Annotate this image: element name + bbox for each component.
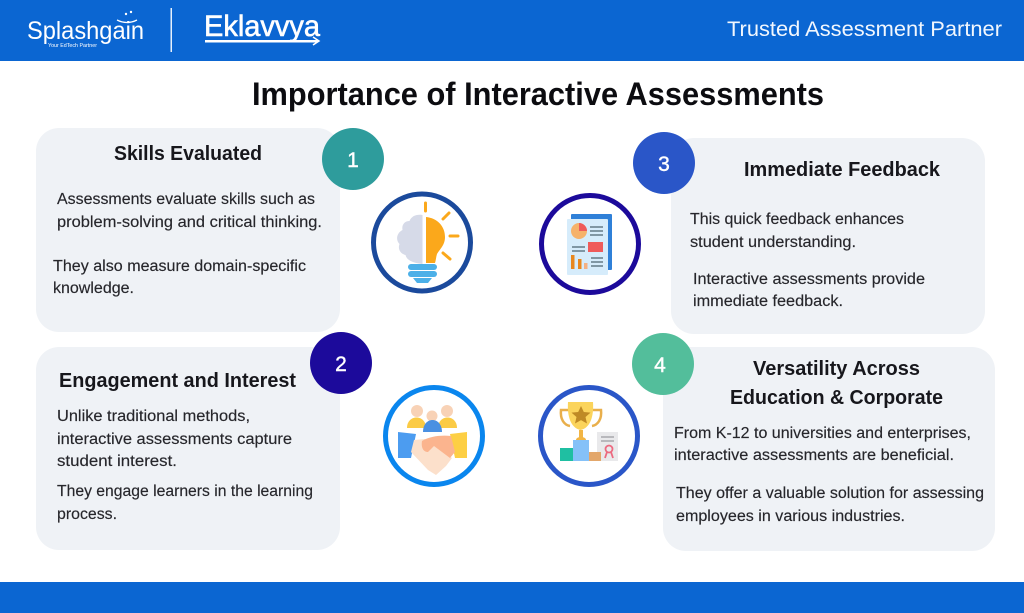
panel: immediate feedback xyxy=(671,138,985,334)
text: engagement paragraph two: They engage learners in the learning xyxy=(57,483,313,500)
header bar xyxy=(0,0,1024,61)
text: skills paragraph two: They also measure domain-specific xyxy=(53,258,306,275)
text: feedback paragraph two: immediate feedback. xyxy=(693,293,843,310)
text: skills paragraph one: Assessments evaluate skills such as xyxy=(57,191,315,208)
text: versatility paragraph one: interactive assessments are beneficial. xyxy=(674,447,954,464)
text: skills paragraph one: problem-solving and critical thinking. xyxy=(57,214,322,231)
icon: handshake team xyxy=(386,388,482,484)
tagline: Trusted Assessment Partner xyxy=(727,18,1002,41)
text: feedback paragraph two: Interactive assessments provide xyxy=(693,271,925,288)
heading: skills evaluated: Skills Evaluated xyxy=(114,143,262,165)
icon: report document xyxy=(542,196,638,292)
text: versatility paragraph one: From K-12 to universities and enterprises, xyxy=(674,425,971,442)
number badge 4 xyxy=(632,333,694,395)
text: engagement paragraph one: Unlike traditional methods, xyxy=(57,408,250,425)
number badge 4: 4 xyxy=(654,354,666,377)
number badge 3: 3 xyxy=(658,153,670,176)
heading: engagement and interest: Engagement and Interest xyxy=(59,370,296,392)
text: versatility paragraph two: employees in various industries. xyxy=(676,508,905,525)
heading: versatility: Versatility Across xyxy=(753,358,920,380)
heading: versatility xyxy=(730,358,943,409)
number badge 1: 1 xyxy=(347,149,359,172)
text: skills paragraph two xyxy=(53,258,306,297)
text: engagement paragraph two: process. xyxy=(57,506,117,523)
number badge 3 xyxy=(633,132,695,194)
number badge 2 xyxy=(310,332,372,394)
text: feedback paragraph one xyxy=(690,211,904,251)
text: engagement paragraph one: interactive assessments capture xyxy=(57,431,292,448)
text: versatility paragraph two xyxy=(676,485,984,525)
logo: Eklavvya: Eklavvya xyxy=(204,10,320,43)
text: engagement paragraph one: student interest. xyxy=(57,453,177,470)
text: engagement paragraph two xyxy=(57,483,313,523)
logo: Splashgain: Splashgain xyxy=(27,17,144,45)
text: feedback paragraph two xyxy=(693,271,925,310)
text: feedback paragraph one: student understanding. xyxy=(690,234,856,251)
panel: engagement and interest xyxy=(36,347,340,550)
panel: skills evaluated xyxy=(36,128,340,332)
number badge 2: 2 xyxy=(335,353,347,376)
logo: Splashgain: Your EdTech Partner xyxy=(48,43,97,49)
panel: versatility xyxy=(663,347,995,551)
text: skills paragraph two: knowledge. xyxy=(53,280,134,297)
text: skills paragraph one xyxy=(57,191,322,231)
heading: versatility: Education & Corporate xyxy=(730,387,943,409)
title: Importance of Interactive Assessments xyxy=(252,76,824,112)
text: feedback paragraph one: This quick feedback enhances xyxy=(690,211,904,228)
icon: trophy and certificate xyxy=(540,388,638,484)
footer bar xyxy=(0,582,1024,613)
text: versatility paragraph two: They offer a valuable solution for assessing xyxy=(676,485,984,502)
number badge 1 xyxy=(322,128,384,190)
heading: immediate feedback: Immediate Feedback xyxy=(744,159,941,181)
icon: brain light bulb xyxy=(374,194,470,291)
text: versatility paragraph one xyxy=(674,425,971,464)
text: engagement paragraph one xyxy=(57,408,292,470)
